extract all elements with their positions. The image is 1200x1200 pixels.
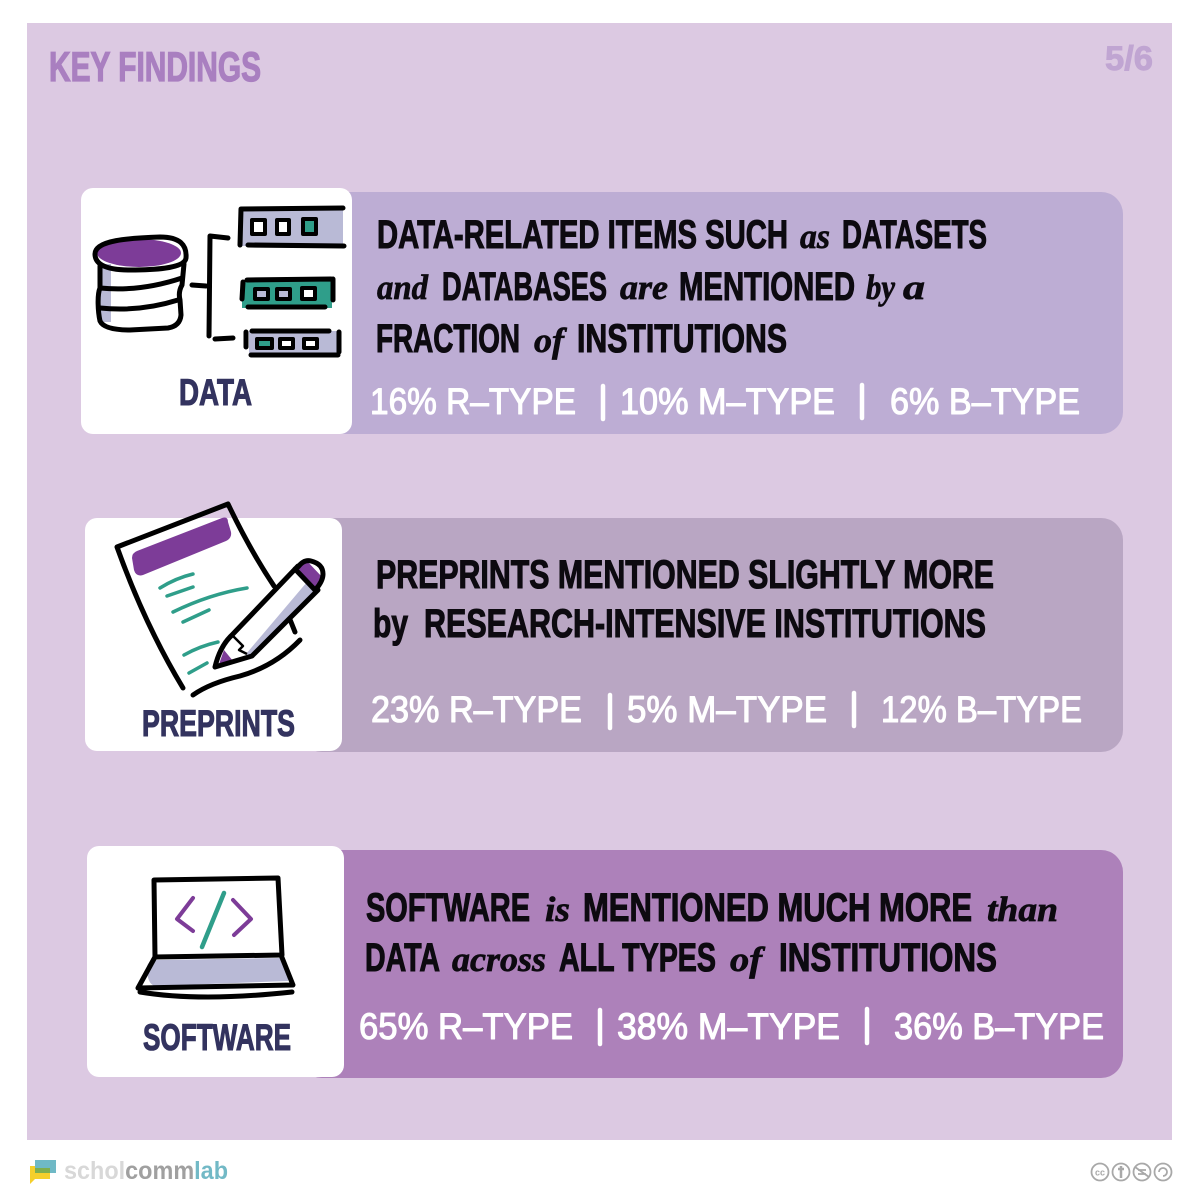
icon: laptop with code — [138, 878, 293, 997]
text: software finding: across — [452, 940, 546, 979]
licence icons: cc — [1095, 1168, 1105, 1178]
stats: data: 10% M–TYPE — [620, 381, 835, 422]
text: software finding — [365, 886, 1058, 980]
text: data finding: DATA-RELATED ITEMS SUCH — [377, 213, 788, 257]
text: preprints finding: PREPRINTS MENTIONED SLIGHTLY MORE — [376, 553, 994, 597]
text: data finding — [376, 213, 987, 361]
panel: preprints — [85, 504, 1123, 752]
text: preprints finding — [373, 553, 994, 646]
stats: preprints — [371, 689, 1082, 730]
label: software: SOFTWARE — [143, 1017, 291, 1058]
text: software finding: MENTIONED MUCH MORE — [583, 886, 972, 930]
panel: data — [81, 188, 1123, 434]
panel: software — [87, 846, 1123, 1078]
stats: preprints: 5% M–TYPE — [627, 689, 827, 730]
stats: preprints: 23% R–TYPE — [371, 689, 582, 730]
text: data finding: MENTIONED — [679, 265, 855, 309]
label: data: DATA — [179, 372, 252, 413]
text: data finding: FRACTION — [376, 317, 520, 361]
icon: database with records — [95, 208, 344, 356]
stats: software: 36% B–TYPE — [894, 1006, 1104, 1047]
footer logo: scholcommlab: scholcommlab — [64, 1157, 228, 1185]
text: data finding: DATASETS — [842, 213, 987, 257]
text: software finding: DATA — [365, 936, 440, 980]
stats: data: 6% B–TYPE — [890, 381, 1080, 422]
text: data finding: a — [903, 268, 925, 307]
title: KEY FINDINGS — [49, 43, 261, 90]
icon: document and pencil — [117, 504, 323, 695]
text: data finding: DATABASES — [442, 265, 607, 309]
text: preprints finding: RESEARCH-INTENSIVE INSTITUTIONS — [424, 602, 986, 646]
text: software finding: than — [987, 890, 1058, 929]
text: software finding: SOFTWARE — [366, 886, 530, 930]
text: data finding: as — [800, 217, 830, 256]
stats: software: 38% M–TYPE — [617, 1006, 840, 1047]
licence icons — [1092, 1164, 1172, 1180]
stats: data — [370, 381, 1080, 422]
text: data finding: INSTITUTIONS — [577, 317, 787, 361]
text: data finding: by — [866, 268, 895, 307]
text: data finding: and — [377, 268, 428, 307]
stats: software: 65% R–TYPE — [359, 1006, 573, 1047]
text: software finding: of — [730, 940, 766, 979]
text: software finding: INSTITUTIONS — [779, 936, 997, 980]
stats: software — [359, 1006, 1104, 1047]
page number: 5/6 — [1105, 40, 1153, 78]
text: software finding: is — [545, 890, 570, 929]
text: preprints finding: by — [373, 602, 409, 646]
text: software finding: ALL TYPES — [559, 936, 716, 980]
text: data finding: of — [534, 321, 567, 360]
label: preprints: PREPRINTS — [142, 703, 295, 744]
text: data finding: are — [620, 268, 668, 307]
stats: data: 16% R–TYPE — [370, 381, 576, 422]
stats: preprints: 12% B–TYPE — [881, 689, 1082, 730]
